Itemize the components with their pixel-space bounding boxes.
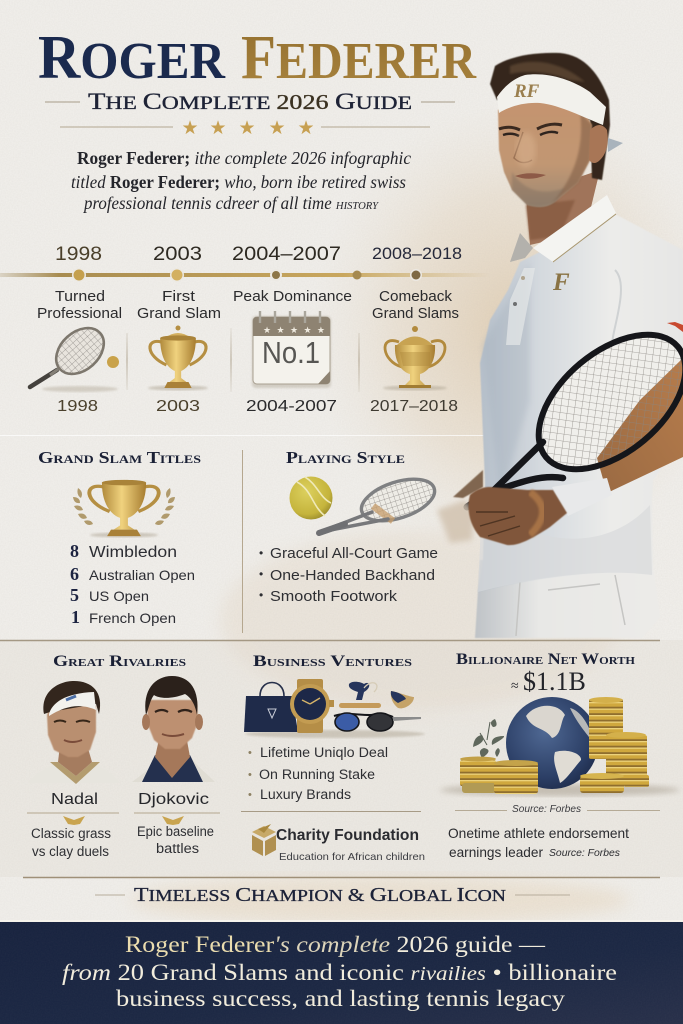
icon: No.1 calendar: No.1 bbox=[262, 335, 320, 370]
footer text: Roger Federer 's complete 2026 guide — bbox=[125, 932, 546, 957]
collar bbox=[510, 233, 533, 262]
endorsement caption: Onetime athlete endorsement bbox=[448, 825, 629, 841]
source note: Source: Forbes bbox=[512, 803, 582, 815]
timeline years: 2003 bbox=[153, 244, 202, 265]
puma mark bbox=[667, 322, 683, 332]
title: FEDERER bbox=[241, 24, 477, 92]
stars divider: ★ bbox=[268, 117, 286, 139]
grand slam counts: 1 bbox=[71, 607, 80, 627]
portrait: Djokovic bbox=[132, 676, 215, 782]
intro text bbox=[71, 148, 411, 213]
title bbox=[38, 24, 477, 92]
playing style bullets: One-Handed Backhand bbox=[270, 568, 435, 584]
icon: No.1 calendar: ★ ★ ★ ★ ★ bbox=[263, 326, 325, 336]
charity caption: Education for African children bbox=[279, 851, 425, 863]
timeline line with dots bbox=[0, 268, 490, 282]
rival captions: battles bbox=[156, 841, 199, 856]
ear bbox=[589, 125, 608, 163]
milestone labels: Peak Dominance bbox=[233, 289, 352, 305]
heading: playing style: Playing Style bbox=[286, 448, 405, 467]
grand slam counts: French Open bbox=[89, 610, 176, 626]
footer text: business success, and lasting tennis legacy bbox=[116, 986, 566, 1011]
timeline bottom years: 1998 bbox=[57, 398, 98, 415]
heading: great rivalries: Great Rivalries bbox=[53, 653, 186, 670]
business bullets: • bbox=[248, 769, 252, 781]
grand slam counts: Australian Open bbox=[89, 567, 195, 583]
grand slam counts: 8 bbox=[70, 541, 79, 561]
grand slam counts bbox=[70, 541, 195, 627]
footer text: from 20 Grand Slams and iconic rivailies • billionaire bbox=[62, 960, 617, 985]
charity heading: Charity Foundation bbox=[276, 827, 419, 844]
headband bbox=[497, 74, 606, 125]
grand slam counts: Wimbledon bbox=[89, 544, 177, 561]
heading: business ventures: Business Ventures bbox=[253, 653, 412, 670]
title: ROGER bbox=[38, 24, 226, 92]
playing style bullets: • bbox=[259, 546, 263, 560]
face features bbox=[499, 124, 562, 130]
panel: billionaire net worth bbox=[440, 651, 680, 860]
illustration: plant bbox=[473, 719, 504, 758]
chevrons bbox=[63, 816, 184, 825]
endorsement caption bbox=[448, 825, 629, 860]
rival captions bbox=[31, 824, 214, 859]
playing style bullets bbox=[259, 546, 438, 605]
milestone labels: First bbox=[162, 289, 195, 305]
net worth figure: $1.1B bbox=[523, 667, 586, 696]
timeline years: 2004–2007 bbox=[232, 244, 341, 265]
icon: tennis ball bbox=[290, 476, 332, 520]
panel: business ventures bbox=[241, 653, 425, 863]
playing style bullets: Graceful All-Court Game bbox=[270, 546, 438, 562]
grand slam counts: 6 bbox=[70, 564, 79, 584]
timeline years bbox=[55, 244, 462, 265]
heading: grand slam titles: Grand Slam Titles bbox=[38, 448, 201, 467]
wristband bbox=[552, 478, 612, 516]
business bullets: On Running Stake bbox=[259, 767, 375, 782]
timeline bottom years: 2017–2018 bbox=[370, 398, 458, 415]
intro text: titled Roger Federer; who, born ibe retired swiss bbox=[71, 172, 406, 192]
stars divider: ★ bbox=[238, 117, 256, 139]
business bullets: • bbox=[248, 747, 252, 759]
milestone labels bbox=[37, 289, 459, 322]
icon: charity book and heart bbox=[252, 824, 276, 856]
icon: comeback trophy bbox=[383, 326, 447, 390]
subtitle: THE COMPLETE 2026 GUIDE bbox=[88, 89, 412, 114]
playing style bullets: • bbox=[259, 567, 263, 581]
milestone labels: Turned bbox=[55, 289, 105, 305]
grand slam counts: US Open bbox=[89, 588, 149, 604]
icon: laurel trophy bbox=[73, 480, 175, 538]
rival captions: Classic grass bbox=[31, 826, 111, 841]
rival name: Djokovic: Djokovic bbox=[138, 791, 209, 808]
shirt bbox=[478, 214, 683, 592]
footer band bbox=[0, 920, 683, 1024]
milestone labels: Grand Slams bbox=[372, 306, 459, 322]
racket bbox=[467, 308, 683, 507]
timeline bottom years bbox=[57, 398, 458, 415]
tagline: TIMELESS CHAMPION & GLOBAL ICON bbox=[134, 884, 506, 906]
heading: net worth: Billionaire Net Worth bbox=[456, 651, 635, 668]
face bbox=[498, 100, 592, 207]
panel: grand slam titles bbox=[38, 448, 201, 627]
business bullets: • bbox=[248, 789, 252, 801]
shorts bbox=[475, 560, 660, 638]
stars divider: ★ bbox=[209, 117, 227, 139]
illustration: coin stacks bbox=[460, 697, 649, 794]
intro text: Roger Federer; ithe complete 2026 infographic bbox=[77, 148, 411, 168]
business bullets bbox=[248, 745, 388, 802]
footer text bbox=[62, 932, 617, 1011]
icon: racket and ball bbox=[30, 319, 119, 392]
panel: playing style bbox=[259, 448, 440, 605]
business bullets: Luxury Brands bbox=[260, 787, 351, 802]
grand slam counts: 5 bbox=[70, 585, 79, 605]
net worth figure: ≈ bbox=[511, 679, 519, 694]
panel: great rivalries bbox=[27, 653, 220, 860]
headband logo: RF bbox=[513, 81, 540, 102]
forearm bbox=[597, 358, 683, 493]
rival captions: vs clay duels bbox=[32, 844, 109, 859]
timeline bottom years: 2003 bbox=[156, 398, 200, 415]
icon: luxury goods bbox=[244, 679, 425, 738]
portrait: Roger Federer with racket bbox=[437, 53, 683, 638]
illustration: globe bbox=[440, 697, 680, 796]
stars divider: ★ bbox=[181, 117, 199, 139]
playing style bullets: Smooth Footwork bbox=[270, 589, 398, 605]
timeline bottom years: 2004-2007 bbox=[246, 398, 337, 415]
icon: first grand slam trophy bbox=[148, 326, 208, 390]
intro text: professional tennis cdreer of all time HISTORY bbox=[82, 193, 380, 213]
milestone labels: Comeback bbox=[379, 289, 453, 305]
racket strings backing bbox=[514, 308, 683, 496]
icon: racket bbox=[319, 471, 440, 533]
left forearm and sand smudge bbox=[437, 500, 475, 543]
milestone labels: Grand Slam bbox=[137, 306, 221, 322]
hair bbox=[490, 53, 610, 180]
timeline bbox=[0, 244, 490, 415]
rival captions: Epic baseline bbox=[137, 824, 214, 839]
rival name: Nadal: Nadal bbox=[51, 791, 98, 808]
hand bbox=[468, 487, 567, 545]
icon: No.1 calendar bbox=[252, 311, 331, 388]
portrait: Nadal bbox=[28, 681, 120, 784]
endorsement caption: Source: Forbes bbox=[549, 847, 621, 859]
stars divider: ★ bbox=[297, 117, 315, 139]
milestone labels: Professional bbox=[37, 306, 122, 322]
timeline years: 1998 bbox=[55, 244, 102, 265]
stars divider bbox=[60, 117, 430, 139]
shirt logo: F bbox=[552, 269, 570, 296]
neck bbox=[526, 170, 600, 245]
playing style bullets: • bbox=[259, 588, 263, 602]
business bullets: Lifetime Uniqlo Deal bbox=[260, 745, 388, 760]
endorsement caption: earnings leader bbox=[449, 844, 543, 860]
timeline years: 2008–2018 bbox=[372, 244, 462, 263]
